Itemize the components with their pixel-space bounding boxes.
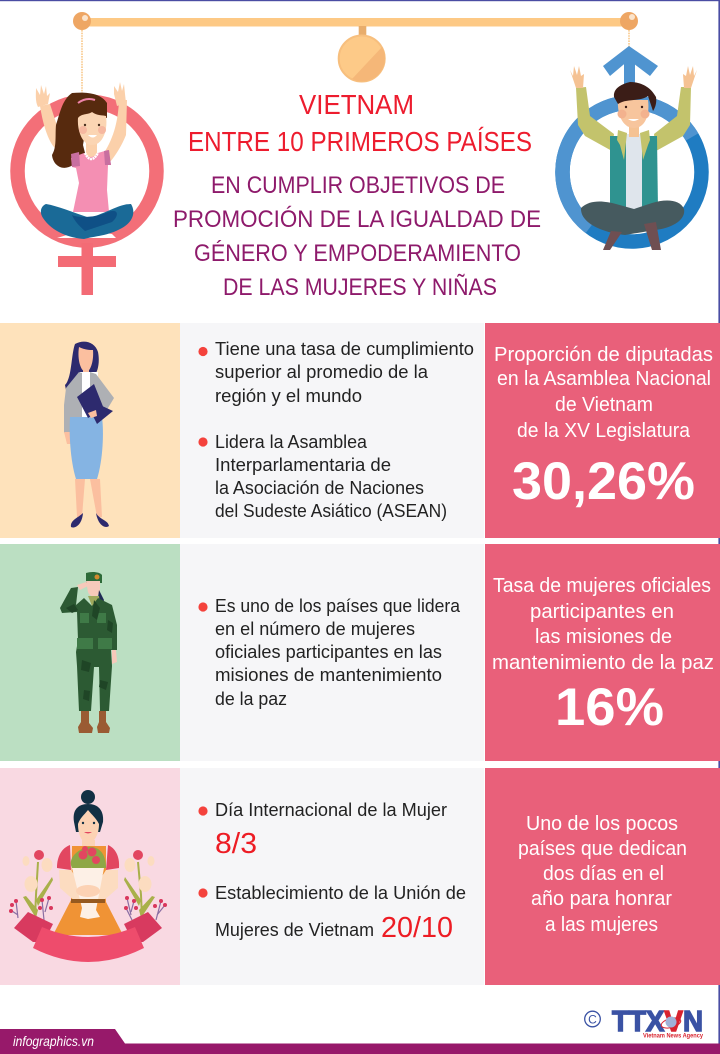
bullet list 2 [198, 595, 461, 709]
logo: TTXVN: TTXVN [612, 1006, 703, 1038]
callout: two days: Uno de los pocos [526, 813, 678, 835]
bullet list 3: 20/10 [381, 912, 453, 944]
stat: 16%: las misiones de [535, 626, 672, 648]
stat: 30,26%: en la Asamblea Nacional [497, 368, 711, 390]
stat: 16%: mantenimiento de la paz [492, 652, 714, 674]
icon: man in male symbol [562, 46, 702, 250]
icon: woman in female symbol [18, 82, 156, 295]
panel: row 2 peacekeeping [0, 544, 720, 761]
title: ENTRE 10 PRIMEROS PAÍSES [188, 126, 532, 157]
icon: soldier [60, 572, 117, 733]
bullet list 2: Es uno de los países que lidera [215, 595, 461, 616]
icon: woman with bouquet [9, 790, 167, 962]
stat: 16%: Tasa de mujeres oficiales [493, 575, 711, 597]
bullet list 1: Interparlamentaria de [215, 454, 391, 475]
subtitle [173, 172, 541, 301]
callout: two days: a las mujeres [545, 914, 658, 936]
callout: two days [518, 813, 687, 936]
subtitle: DE LAS MUJERES Y NIÑAS [223, 274, 497, 301]
bullet list 1: la Asociación de Naciones [215, 477, 424, 498]
bullet list 1: del Sudeste Asiático (ASEAN) [215, 500, 447, 521]
bullet list 3: Día Internacional de la Mujer [215, 799, 447, 820]
callout: two days: dos días en el [543, 863, 664, 885]
subtitle: PROMOCIÓN DE LA IGUALDAD DE [173, 206, 541, 233]
panel: row 1 parliament [0, 323, 720, 538]
stat: 16%: participantes en [530, 601, 674, 623]
bullet list 2: de la paz [215, 688, 287, 709]
bullet list 1: superior al promedio de la [215, 361, 429, 382]
bullet list 3: Establecimiento de la Unión de [215, 882, 466, 903]
footer bar [0, 1029, 720, 1054]
subtitle: EN CUMPLIR OBJETIVOS DE [211, 172, 505, 199]
stat: 30,26% [494, 344, 713, 511]
bullet list 1 [198, 338, 474, 521]
stat: 30,26%: 30,26% [512, 452, 695, 511]
logo: TTXVN: C [588, 1012, 597, 1026]
footer bar: infographics.vn [13, 1033, 94, 1049]
bullet list 3: 8/3 [215, 828, 257, 860]
callout: two days: año para honrar [531, 888, 672, 910]
bullet list 1: región y el mundo [215, 385, 362, 406]
bullet list 2: en el número de mujeres [215, 618, 415, 639]
bullet list 1: Tiene una tasa de cumplimiento [215, 338, 474, 359]
stat: 30,26%: Proporción de diputadas [494, 344, 713, 366]
stat: 16% [492, 575, 714, 737]
bullet list 3 [198, 799, 466, 944]
logo: TTXVN: Vietnam News Agency [643, 1032, 703, 1040]
icon: businesswoman [64, 342, 114, 527]
subtitle: GÉNERO Y EMPODERAMIENTO [194, 240, 521, 267]
bullet list 2: misiones de mantenimiento [215, 664, 442, 685]
bullet list 2: oficiales participantes en las [215, 641, 442, 662]
title [188, 89, 532, 157]
stat: 30,26%: de la XV Legislatura [517, 420, 691, 442]
panel: row 3 women's days [0, 768, 720, 985]
callout: two days: países que dedican [518, 838, 687, 860]
balance scale [73, 12, 638, 96]
stat: 16%: 16% [555, 678, 664, 737]
title: VIETNAM [299, 89, 414, 120]
bullet list 3: Mujeres de Vietnam [215, 919, 374, 940]
stat: 30,26%: de Vietnam [555, 394, 653, 416]
bullet list 1: Lidera la Asamblea [215, 431, 368, 452]
